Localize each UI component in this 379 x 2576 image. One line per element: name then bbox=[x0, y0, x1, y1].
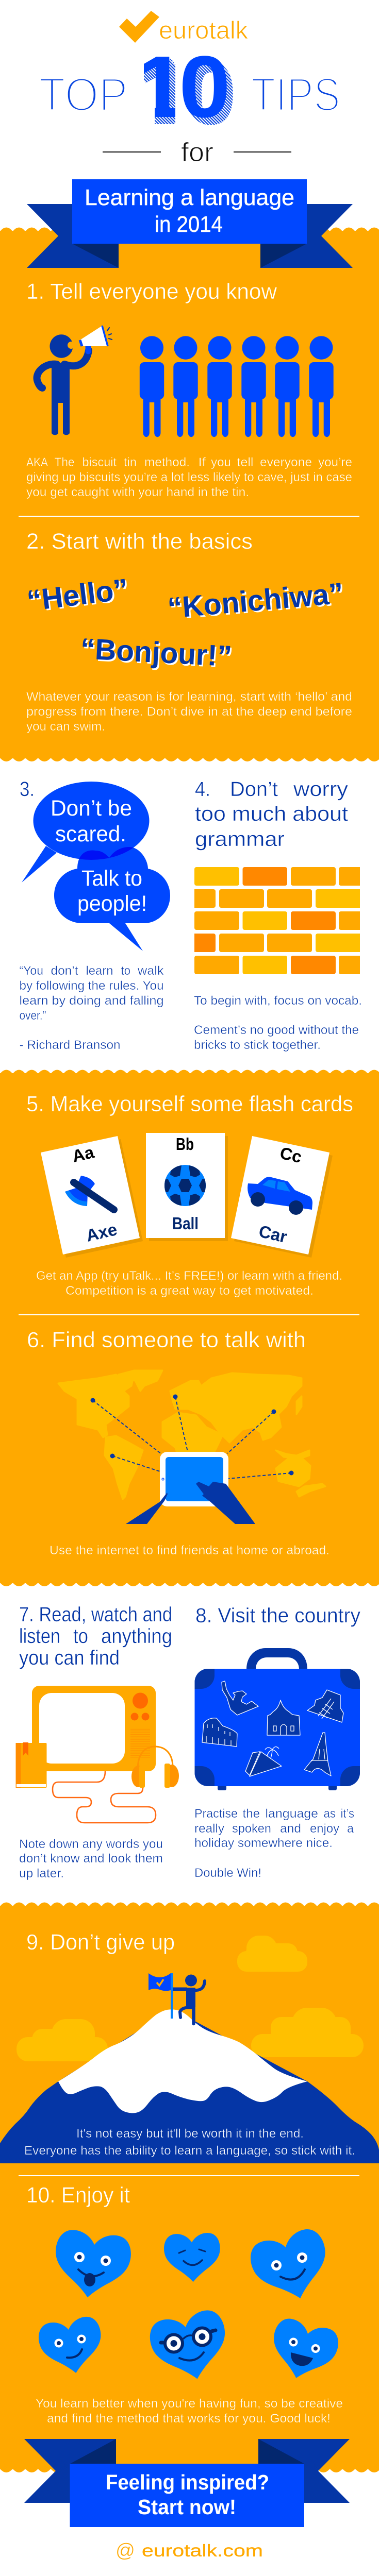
text: tip 4 body: To begin with, focus on vocab. bbox=[194, 994, 362, 1008]
text: tip 9 body: It's not easy but it'll be worth it in the end. bbox=[76, 2127, 304, 2141]
cloud: left bbox=[17, 2019, 108, 2061]
icon: tv, book and headphones bbox=[15, 1686, 179, 1823]
icon: logo check mark bbox=[119, 11, 159, 43]
text: Richard Branson quote: learn bbox=[86, 964, 113, 978]
text: tip 8 body: enjoy bbox=[310, 1822, 339, 1836]
heading: tip 4: Don’t bbox=[230, 778, 278, 801]
banner: learning a language in 2014: in 2014 bbox=[155, 212, 223, 237]
heading: tip 4: 4. bbox=[195, 778, 210, 801]
bubble text: Talk to bbox=[81, 866, 142, 891]
landmark: statue of liberty bbox=[222, 1681, 258, 1715]
text: tip 8 body: the bbox=[242, 1807, 260, 1821]
landmark: colosseum bbox=[202, 1718, 237, 1747]
text: tip 8 body: a bbox=[347, 1822, 354, 1836]
book bbox=[15, 1742, 46, 1788]
title number 10: 1 bbox=[134, 40, 189, 138]
bubble text: scared. bbox=[55, 822, 126, 846]
bubble: don't be scared bbox=[22, 782, 150, 883]
text: tip 10 body: You learn better when you're having fun, so be creative bbox=[36, 2397, 343, 2411]
text: tip 10 body bbox=[36, 2397, 343, 2426]
title number 10: 0 bbox=[185, 45, 237, 143]
text: tip 8 body: language bbox=[265, 1807, 318, 1821]
text: tip 5 body bbox=[36, 1269, 342, 1298]
text: tip 7 body: up later. bbox=[19, 1867, 64, 1880]
website link: @ bbox=[116, 2540, 135, 2562]
text: tip 2 body: progress from there. Don’t dive in at the deep end before bbox=[26, 705, 352, 719]
text: tip 7 body: don’t know and look them bbox=[19, 1852, 163, 1866]
icon: tablet with hands bbox=[126, 1452, 255, 1524]
greeting: Bonjour: “Bonjour!” bbox=[81, 634, 234, 675]
text: tip 5 body: Get an App (try uTalk... It’s FREE!) or learn with a friend. bbox=[36, 1269, 342, 1283]
heart: small smile bbox=[36, 2315, 107, 2378]
text: tip 1 body: you bbox=[211, 455, 231, 469]
heading: tip 7 bbox=[19, 1603, 172, 1669]
orange band 3 bbox=[0, 1902, 379, 2473]
orange band 1 bbox=[0, 227, 379, 762]
logo wordmark: eurotalk bbox=[159, 17, 249, 44]
text: tip 4 body: bricks to stick together. bbox=[194, 1038, 321, 1052]
banner: feeling inspired bbox=[24, 2439, 350, 2527]
flash card: axe bbox=[41, 1136, 143, 1258]
text: Richard Branson quote: don’t bbox=[51, 964, 78, 978]
text: tip 1 body: everyone bbox=[260, 455, 312, 469]
text: tip 8 body: holiday somewhere nice. bbox=[194, 1836, 333, 1850]
icon: person with megaphone bbox=[37, 326, 112, 435]
title word TOP: TOP bbox=[39, 69, 128, 121]
title number 10 bbox=[144, 56, 233, 125]
flash card: car bbox=[231, 1136, 333, 1258]
cloud: small top bbox=[237, 1936, 307, 1972]
heading: tip 8: 8. Visit the country bbox=[195, 1604, 360, 1627]
title number 10: 0 bbox=[180, 40, 232, 138]
icon: car bbox=[248, 1177, 312, 1215]
title word TIPS: TIPS bbox=[251, 69, 340, 121]
text: tip 1 body: tin bbox=[124, 455, 137, 469]
greeting: Bonjour: “Bonjour!” bbox=[79, 632, 233, 673]
heart: smiling right bbox=[246, 2225, 337, 2309]
text: Richard Branson quote: walk bbox=[137, 964, 164, 978]
flash card: axe: Aa bbox=[70, 1142, 96, 1166]
logo bbox=[119, 11, 249, 44]
text: Richard Branson quote: “You bbox=[20, 964, 43, 978]
clouds bbox=[17, 1936, 364, 2061]
text: tip 1 body: you get caught with your hand in the tin. bbox=[26, 485, 249, 499]
title number 10: 1 bbox=[133, 38, 188, 136]
headphone cable bbox=[53, 1771, 156, 1823]
heading: tip 7: listen bbox=[19, 1625, 60, 1648]
text: Richard Branson quote bbox=[20, 964, 164, 1052]
text: tip 2 body: Whatever your reason is for learning, start with ‘hello’ and bbox=[26, 690, 352, 704]
world map bbox=[58, 1370, 325, 1499]
website link bbox=[116, 2540, 263, 2562]
icon: suitcase with landmarks bbox=[195, 1648, 360, 1790]
flash card: car: Cc bbox=[278, 1143, 304, 1166]
text: tip 1 body: The bbox=[55, 455, 74, 469]
text: tip 8 body: spoken bbox=[232, 1822, 271, 1836]
text: Richard Branson quote: - Richard Branson bbox=[20, 1038, 121, 1052]
title number 10: 0 bbox=[184, 44, 235, 142]
heading: tip 7: you can find bbox=[19, 1647, 120, 1669]
greeting: Hello: “Hello” bbox=[27, 574, 131, 619]
heading: tip 7: 7. Read, watch and bbox=[19, 1603, 172, 1626]
text: tip 8 body: as bbox=[324, 1807, 336, 1821]
flash card: car: Car bbox=[257, 1222, 289, 1246]
title number 10: 0 bbox=[179, 38, 230, 136]
heading: tip 1: 1. Tell everyone you know bbox=[26, 279, 277, 304]
icon: flag and climber bbox=[149, 1973, 205, 2024]
heart: glasses bbox=[146, 2307, 234, 2387]
text: tip 1 body bbox=[26, 455, 352, 499]
title number 10: 0 bbox=[182, 42, 234, 140]
heading: tip 10: 10. Enjoy it bbox=[26, 2183, 130, 2208]
landmark: eiffel tower bbox=[304, 1733, 331, 1776]
text: tip 10 body: and find the method that works for you. Good luck! bbox=[47, 2412, 331, 2426]
website link: eurotalk.com bbox=[142, 2541, 263, 2560]
text: tip 1 body: biscuit bbox=[83, 455, 117, 469]
text: tip 4 body: Cement’s no good without the bbox=[194, 1023, 359, 1037]
title number 10: 1 bbox=[137, 44, 192, 142]
cloud: right bbox=[251, 2008, 364, 2057]
text: tip 8 body bbox=[194, 1807, 354, 1880]
speech bubbles bbox=[22, 782, 170, 951]
bubble: talk to people bbox=[54, 847, 170, 951]
heading: tip 4 bbox=[195, 778, 348, 851]
mountain bbox=[0, 2009, 379, 2163]
heading: tip 4: grammar bbox=[195, 828, 285, 851]
text: tip 8 body: Practise bbox=[194, 1807, 238, 1821]
heart: content bbox=[163, 2232, 221, 2283]
text: tip 8 body: really bbox=[194, 1822, 224, 1836]
flash card: ball: Ball bbox=[172, 1214, 199, 1233]
text: tip 7 body bbox=[19, 1837, 163, 1880]
icon: football bbox=[164, 1165, 206, 1206]
text: tip 8 body: and bbox=[280, 1822, 301, 1836]
heading: tip 4: too much about bbox=[195, 803, 348, 825]
banner: feeling inspired: Feeling inspired? bbox=[106, 2470, 269, 2494]
orange band 2 bbox=[0, 1070, 379, 1587]
text: tip 1 body: AKA bbox=[26, 455, 48, 469]
text: tip 1 body: you’re bbox=[318, 455, 352, 469]
title number 10: 1 bbox=[136, 42, 191, 140]
text: tip 2 body: you can swim. bbox=[26, 720, 105, 734]
heart: open mouth bbox=[265, 2315, 342, 2386]
flash card: axe: Axe bbox=[84, 1219, 119, 1245]
greeting: Konichiwa: “Konichiwa” bbox=[168, 578, 347, 626]
heading: tip 4: worry bbox=[293, 778, 348, 801]
headphones bbox=[131, 1747, 179, 1788]
text: tip 1 body: giving up biscuits you’re a lot less likely to cave, just in case bbox=[26, 470, 352, 484]
text: Richard Branson quote: learn by doing and falling bbox=[20, 994, 164, 1008]
icon: axe bbox=[65, 1176, 114, 1210]
text: tip 2 body bbox=[26, 690, 352, 734]
landmark: taj mahal bbox=[267, 1700, 300, 1735]
heading: tip 9: 9. Don’t give up bbox=[26, 1930, 175, 1955]
text: tip 8 body: Double Win! bbox=[194, 1866, 261, 1880]
heading: tip 5: 5. Make yourself some flash cards bbox=[26, 1092, 353, 1116]
banner: learning a language in 2014: Learning a language bbox=[85, 185, 294, 210]
landmark: pyramid and palm bbox=[245, 1747, 282, 1776]
landmark: stepped pyramid bbox=[307, 1690, 343, 1722]
heading: tip 3 number: 3. bbox=[20, 778, 35, 801]
title bbox=[41, 56, 337, 125]
flash card: ball: Bb bbox=[176, 1134, 194, 1154]
text: tip 8 body: it’s bbox=[340, 1807, 354, 1821]
heading: tip 7: to bbox=[73, 1625, 88, 1648]
text: tip 1 body: method. bbox=[144, 455, 190, 469]
heart: tongue out bbox=[50, 2228, 133, 2302]
flash card: ball bbox=[146, 1133, 228, 1241]
for with rules: for bbox=[181, 138, 213, 167]
bubble text bbox=[51, 796, 147, 916]
hearts group bbox=[36, 2225, 342, 2387]
greeting: Konichiwa: “Konichiwa” bbox=[167, 577, 345, 625]
heading: tip 2: 2. Start with the basics bbox=[26, 529, 253, 554]
text: tip 1 body: If bbox=[198, 455, 206, 469]
greeting: Hello: “Hello” bbox=[25, 572, 130, 618]
heading: tip 6: 6. Find someone to talk with bbox=[27, 1328, 306, 1352]
text: tip 9 body: Everyone has the ability to learn a language, so stick with it. bbox=[24, 2144, 355, 2158]
text: Richard Branson quote: to bbox=[121, 964, 130, 978]
icon: brick wall bbox=[194, 867, 360, 974]
text: Richard Branson quote: by following the rules. You bbox=[20, 979, 164, 993]
banner: learning a language in 2014 bbox=[27, 179, 353, 268]
connection lines and dots bbox=[91, 1394, 294, 1479]
bubble text: people! bbox=[77, 891, 147, 916]
text: tip 7 body: Note down any words you bbox=[19, 1837, 163, 1851]
tv bbox=[32, 1686, 156, 1771]
bubble text: Don’t be bbox=[51, 796, 132, 821]
text: tip 5 body: Competition is a great way to get motivated. bbox=[65, 1284, 314, 1298]
text: tip 1 body: tell bbox=[237, 455, 254, 469]
heading: tip 7: anything bbox=[101, 1625, 172, 1648]
text: tip 9 body bbox=[24, 2127, 355, 2158]
text: tip 6 body: Use the internet to find friends at home or abroad. bbox=[50, 1544, 329, 1557]
title number 10: 1 bbox=[139, 45, 194, 143]
text: tip 4 body bbox=[194, 994, 362, 1052]
icon: crowd of six people bbox=[140, 336, 334, 437]
text: Richard Branson quote: over.” bbox=[20, 1009, 46, 1023]
banner: feeling inspired: Start now! bbox=[138, 2495, 236, 2519]
